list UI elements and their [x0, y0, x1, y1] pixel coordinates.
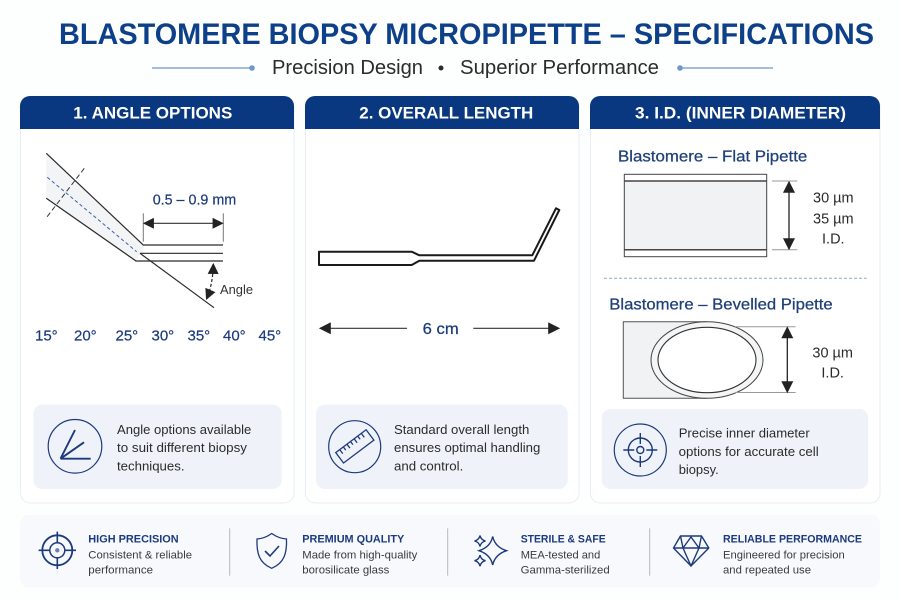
panel heading: angle options [20, 96, 294, 129]
icon: shield [257, 534, 287, 568]
flat pipette diagram [624, 174, 797, 257]
angle values: 40° [223, 328, 246, 345]
angle values: 25° [116, 328, 138, 345]
info text: angle: techniques. [117, 458, 184, 473]
panel heading: inner diameter: 3. I.D. (INNER DIAMETER) [635, 103, 846, 122]
info box: inner diameter [602, 409, 868, 489]
feature: sterile and safe [474, 533, 610, 577]
info text: length: Standard overall length [394, 422, 529, 437]
icon: target [39, 532, 76, 569]
feature text: sterile and safe: MEA-tested and [521, 549, 600, 561]
feature text: premium quality [302, 533, 418, 577]
flat pipette sizes: 35 µm [813, 211, 854, 227]
panel: inner diameter [590, 96, 880, 503]
info text: length: ensures optimal handling [394, 440, 540, 455]
feature: high precision [39, 532, 192, 577]
subtitle [152, 57, 773, 79]
info box: length [316, 404, 568, 489]
info text: angle: to suit different biopsy [117, 440, 247, 455]
feature text: sterile and safe [521, 533, 610, 577]
info text: length: and control. [394, 458, 463, 473]
dimension label: 0.5 – 0.9 mm [153, 193, 236, 209]
feature text: reliable performance: Engineered for precision [723, 549, 845, 561]
angle label: Angle [220, 283, 253, 297]
feature text: sterile and safe: Gamma-sterilized [521, 565, 610, 577]
panel heading: overall length: 2. OVERALL LENGTH [359, 103, 533, 122]
panel: overall length [305, 96, 579, 503]
icon: crosshair [614, 424, 666, 476]
panel heading: angle options: 1. ANGLE OPTIONS [73, 103, 232, 122]
feature text: reliable performance [723, 533, 862, 577]
bevelled pipette diagram [623, 322, 796, 398]
flat pipette sizes: 30 µm [813, 190, 854, 206]
bevelled pipette size: 30 µm [812, 345, 853, 361]
info box: angle [33, 404, 282, 489]
info text: inner diameter: options for accurate cell [679, 444, 819, 459]
info text: inner diameter [679, 426, 819, 477]
angle values [35, 328, 281, 345]
bevelled pipette size [812, 345, 853, 381]
feature strip [20, 515, 880, 588]
feature: reliable performance [674, 533, 862, 577]
info text: length [394, 422, 540, 473]
panel: angle options [20, 96, 294, 503]
feature text: sterile and safe: STERILE & SAFE [521, 533, 606, 545]
subtitle: Precision Design [272, 57, 423, 79]
angle values: 20° [74, 328, 97, 345]
angle pipette diagram [46, 153, 223, 308]
panel heading: overall length [305, 96, 579, 129]
info text: angle [117, 422, 251, 473]
info text: angle: Angle options available [117, 422, 251, 437]
feature text: premium quality: borosilicate glass [302, 565, 390, 577]
feature text: premium quality: PREMIUM QUALITY [302, 533, 405, 545]
info text: inner diameter: Precise inner diameter [679, 426, 810, 441]
bevelled pipette heading: Blastomere – Bevelled Pipette [609, 296, 833, 313]
angle values: 45° [258, 328, 281, 345]
feature text: high precision: Consistent & reliable [88, 549, 192, 561]
info text: inner diameter: biopsy. [679, 462, 719, 477]
angle values: 35° [188, 328, 210, 345]
bevelled pipette size: I.D. [821, 365, 844, 381]
length arrow: 6 cm [423, 321, 459, 338]
angle values: 30° [152, 328, 174, 345]
flat pipette heading: Blastomere – Flat Pipette [618, 149, 807, 166]
panel heading: inner diameter [590, 96, 880, 129]
feature text: high precision: HIGH PRECISION [88, 533, 179, 545]
feature text: high precision: performance [88, 565, 153, 577]
icon: angle [48, 420, 102, 473]
subtitle: Superior Performance [460, 57, 659, 79]
flat pipette sizes [813, 190, 854, 248]
feature text: high precision [88, 533, 192, 577]
feature: premium quality [257, 533, 418, 577]
angle values: 15° [35, 328, 58, 345]
icon: sparkles [474, 536, 506, 566]
flat pipette sizes: I.D. [822, 232, 845, 248]
pipette outline [319, 208, 559, 265]
feature text: reliable performance: RELIABLE PERFORMANCE [723, 533, 862, 545]
feature text: premium quality: Made from high-quality [302, 549, 418, 561]
icon: ruler [329, 421, 381, 473]
title: BLASTOMERE BIOPSY MICROPIPETTE – SPECIFICATIONS [59, 18, 874, 51]
icon: diamond [674, 536, 709, 566]
feature text: reliable performance: and repeated use [723, 565, 811, 577]
